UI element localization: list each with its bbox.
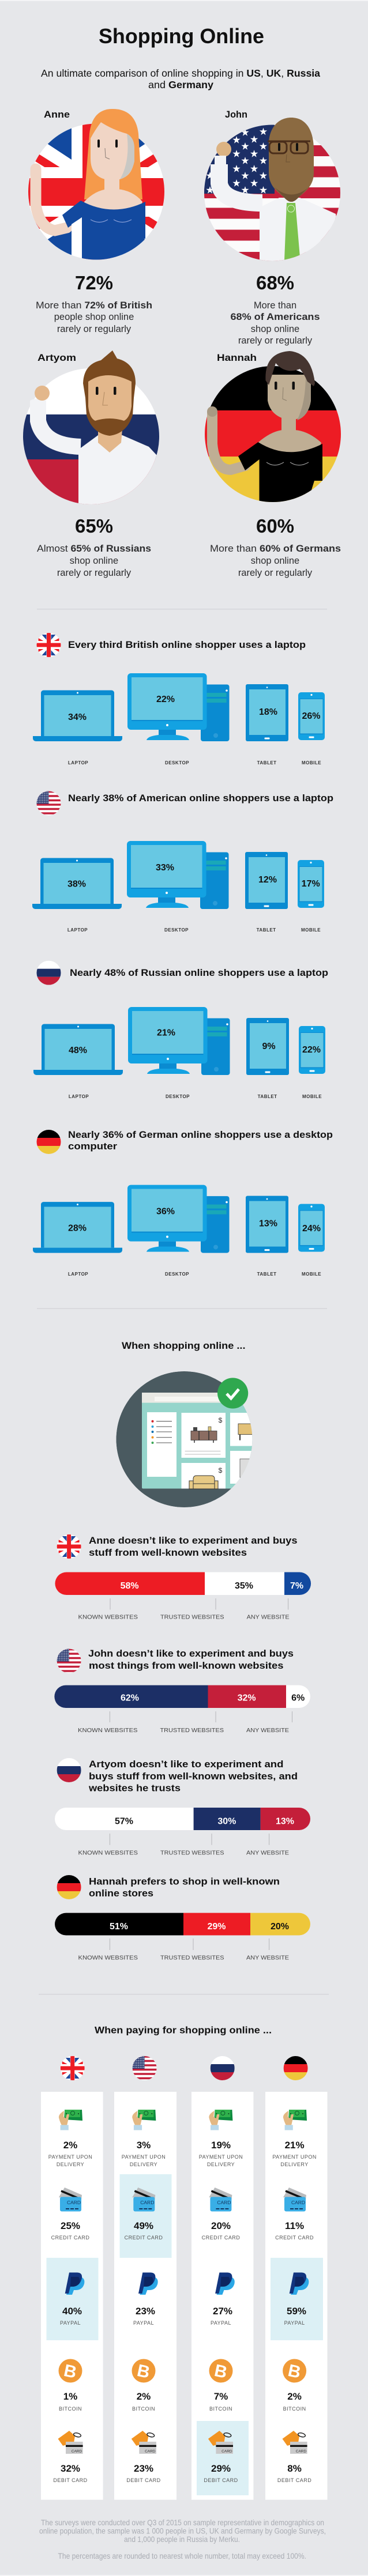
- icon: German flag: [284, 2056, 308, 2080]
- heading: Germany devices: computer: [68, 1141, 117, 1152]
- figure: John: [215, 118, 346, 265]
- subtitle: An ultimate comparison of online shopping in US, UK, Russia: [41, 67, 320, 79]
- bitcoin: 2%: [137, 2391, 151, 2402]
- description: Russians: Almost 65% of Russians: [37, 544, 151, 554]
- name: John: John: [225, 109, 247, 120]
- paypal: PAYPAL: [60, 2320, 81, 2326]
- paypal: PAYPAL: [211, 2320, 231, 2326]
- stacked bar: John: 62%: [121, 1694, 139, 1703]
- payment upon delivery: PAYMENT UPON: [48, 2154, 92, 2160]
- devices: US: 12%: [258, 875, 277, 885]
- stacked bar: Artyom: 57%: [115, 1817, 133, 1826]
- devices: Germany: 28%: [68, 1223, 87, 1234]
- credit card: CREDIT CARD: [275, 2235, 314, 2241]
- bitcoin: BITCOIN: [283, 2406, 306, 2412]
- devices: Germany: 24%: [302, 1224, 321, 1234]
- bitcoin: 1%: [63, 2391, 77, 2402]
- devices: US: 33%: [156, 863, 174, 873]
- devices: Germany: TABLET: [257, 1272, 277, 1277]
- stat: 68%: 68%: [256, 272, 294, 293]
- devices: US: TABLET: [257, 927, 276, 933]
- debit card: 8%: [287, 2463, 302, 2474]
- stacked bar: Artyom: 13%: [276, 1817, 294, 1826]
- debit card: [277, 2431, 311, 2483]
- stacked bar: Hannah: 20%: [271, 1922, 289, 1932]
- description: British: More than 72% of British: [36, 300, 152, 311]
- payment upon delivery: PAYMENT UPON: [122, 2154, 166, 2160]
- bar labels: Anne: TRUSTED WEBSITES: [160, 1614, 224, 1621]
- payment upon delivery: 21%: [285, 2140, 305, 2151]
- heading: Artyom: websites he trusts: [88, 1782, 181, 1794]
- debit card: [53, 2431, 88, 2483]
- devices: Russia: [33, 1007, 325, 1099]
- footnote: online population, the sample was 1 000 people in US, UK and Germany by Google Surveys,: [39, 2526, 326, 2535]
- devices: UK: DESKTOP: [165, 760, 189, 765]
- devices: Germany: 13%: [259, 1219, 277, 1229]
- name: Hannah: Hannah: [217, 352, 257, 363]
- figure: Anne: [36, 109, 145, 265]
- stacked bar: Hannah: [55, 1913, 310, 1936]
- heading: Hannah: Hannah prefers to shop in well-known: [89, 1876, 280, 1887]
- bar labels: John: ANY WEBSITE: [246, 1727, 289, 1734]
- payment upon delivery: DELIVERY: [207, 2162, 235, 2167]
- stacked bar: Anne: [55, 1572, 311, 1595]
- stacked bar: John: [54, 1685, 310, 1708]
- stacked bar: Artyom: 30%: [217, 1817, 236, 1826]
- footnote: [39, 2518, 326, 2560]
- description: Germans: shop online: [251, 556, 299, 566]
- icon: Russian flag: [37, 961, 61, 985]
- description: Germans: More than 60% of Germans: [210, 544, 341, 554]
- icon: US flag: [133, 2056, 157, 2080]
- debit card: [204, 2431, 238, 2483]
- column: US payments: [114, 2056, 177, 2500]
- section: US devices: [32, 791, 333, 933]
- title: Shopping Online: [99, 24, 264, 48]
- bar labels: Hannah: ANY WEBSITE: [246, 1954, 289, 1961]
- bar labels: Anne: ANY WEBSITE: [247, 1614, 290, 1621]
- stacked bar: Anne: 35%: [235, 1581, 253, 1591]
- credit card: 25%: [61, 2220, 80, 2231]
- description: Americans: shop online: [251, 324, 299, 334]
- devices: US: 17%: [302, 879, 320, 889]
- debit card: 32%: [61, 2463, 80, 2474]
- illustration: online store window: [116, 1371, 257, 1507]
- name: Artyom: Artyom: [37, 352, 76, 363]
- devices: UK: 34%: [68, 712, 87, 722]
- devices: UK: [33, 673, 325, 765]
- description: British: rarely or regularly: [57, 324, 132, 334]
- payment upon delivery: 2%: [63, 2140, 77, 2151]
- stacked bar: John: 6%: [291, 1694, 305, 1703]
- payment upon delivery: PAYMENT UPON: [199, 2154, 243, 2160]
- heading: Hannah: [89, 1876, 280, 1899]
- icon: UK flag: [57, 1534, 81, 1559]
- paypal: 40%: [62, 2306, 82, 2317]
- payment upon delivery: [272, 2110, 317, 2167]
- UK flag circle: [28, 123, 164, 260]
- bar labels: Artyom: ANY WEBSITE: [246, 1849, 289, 1856]
- bitcoin: 2%: [287, 2391, 302, 2402]
- devices: Germany: 36%: [156, 1207, 175, 1216]
- heading: John: John doesn’t like to experiment and buys: [88, 1648, 294, 1659]
- bar labels: Hannah: [78, 1938, 289, 1961]
- figure: Artyom: [30, 350, 162, 507]
- bar labels: Artyom: TRUSTED WEBSITES: [160, 1849, 224, 1856]
- paypal: 27%: [213, 2306, 232, 2317]
- stacked bar: Hannah: 51%: [110, 1922, 128, 1932]
- stacked bar: Artyom: [55, 1808, 310, 1830]
- heading: Germany devices: [68, 1129, 333, 1152]
- devices: Russia: LAPTOP: [69, 1094, 89, 1099]
- icon: Russian flag: [211, 2056, 235, 2080]
- description: Americans: 68% of Americans: [231, 312, 320, 322]
- section: Germany devices: [33, 1129, 333, 1277]
- bitcoin: B: [286, 2361, 302, 2382]
- icon: UK flag: [37, 633, 61, 657]
- icon: US flag: [37, 791, 61, 815]
- bitcoin: B: [136, 2361, 152, 2382]
- description: British: [36, 300, 152, 334]
- bitcoin: BITCOIN: [59, 2406, 82, 2412]
- heading: Russia devices: Nearly 48% of Russian online shoppers use a laptop: [70, 967, 328, 978]
- devices: Russia: 9%: [262, 1042, 276, 1051]
- section: UK devices: [33, 633, 325, 765]
- description: Germans: [210, 544, 341, 578]
- bitcoin: [132, 2359, 156, 2412]
- figure: Hannah: [207, 351, 322, 507]
- payment upon delivery: [48, 2110, 92, 2167]
- section: Artyom websites: [55, 1758, 310, 1856]
- paypal: [133, 2272, 158, 2326]
- icon: US flag: [57, 1649, 81, 1673]
- payment upon delivery: DELIVERY: [280, 2162, 309, 2167]
- bar labels: John: TRUSTED WEBSITES: [160, 1727, 224, 1734]
- paypal: [284, 2272, 309, 2326]
- column: UK payments: [41, 2056, 103, 2500]
- debit card: 23%: [134, 2463, 153, 2474]
- highlight: PayPal: [46, 2258, 98, 2340]
- devices: Germany: LAPTOP: [68, 1272, 88, 1277]
- payment upon delivery: 3%: [137, 2140, 151, 2151]
- heading: Anne: stuff from well-known websites: [89, 1547, 247, 1558]
- devices: Germany: [33, 1185, 325, 1277]
- paypal: [211, 2272, 235, 2326]
- payment upon delivery: [122, 2110, 166, 2167]
- credit card: 20%: [211, 2220, 231, 2231]
- credit card: [275, 2187, 314, 2241]
- bitcoin: BITCOIN: [132, 2406, 155, 2412]
- credit card: 49%: [134, 2220, 153, 2231]
- stacked bar: Anne: 58%: [121, 1581, 139, 1591]
- illustration: online store window: $: [219, 1416, 223, 1424]
- devices: UK: 22%: [156, 695, 175, 704]
- icon: UK flag: [61, 2056, 85, 2080]
- footnote: The percentages are rounded to nearest whole number, total may exceed 100%.: [58, 2551, 306, 2560]
- heading: John: most things from well-known websites: [89, 1660, 284, 1671]
- credit card: CREDIT CARD: [202, 2235, 240, 2241]
- footnote: The surveys were conducted over Q3 of 2015 on sample representative in demographics on: [41, 2518, 324, 2527]
- description: Russians: rarely or regularly: [57, 568, 132, 578]
- Russian flag circle: [23, 368, 159, 506]
- heading: when paying: When paying for shopping online ...: [95, 2024, 272, 2036]
- bitcoin: [209, 2359, 233, 2412]
- payment upon delivery: 19%: [211, 2140, 231, 2151]
- heading: when shopping online: When shopping online ...: [122, 1340, 246, 1351]
- heading: Hannah: online stores: [89, 1888, 153, 1899]
- subtitle: and Germany: [148, 79, 213, 90]
- devices: Russia: DESKTOP: [166, 1094, 190, 1099]
- icon: Russian flag: [57, 1758, 81, 1782]
- heading: Artyom: [88, 1759, 298, 1794]
- devices: UK: MOBILE: [302, 760, 321, 765]
- credit card: [202, 2187, 240, 2241]
- highlight: PayPal: [271, 2258, 323, 2340]
- payment upon delivery: [199, 2110, 243, 2167]
- bar labels: Hannah: TRUSTED WEBSITES: [160, 1954, 224, 1961]
- paypal: [60, 2272, 84, 2326]
- section: John websites: [54, 1648, 310, 1734]
- description: Russians: shop online: [70, 556, 118, 566]
- description: Americans: More than: [254, 300, 296, 311]
- devices: US: LAPTOP: [67, 927, 88, 933]
- devices: Russia: TABLET: [258, 1094, 277, 1099]
- bitcoin: B: [62, 2361, 78, 2382]
- column: Germany payments: [265, 2056, 328, 2500]
- devices: Russia: 22%: [302, 1045, 321, 1055]
- heading: John: [88, 1648, 294, 1671]
- bitcoin: [283, 2359, 306, 2412]
- heading: Anne: [89, 1535, 298, 1558]
- stat: 65%: 65%: [75, 515, 113, 537]
- bitcoin: 7%: [214, 2391, 228, 2402]
- payment upon delivery: PAYMENT UPON: [272, 2154, 317, 2160]
- highlight: debit card: [197, 2421, 249, 2495]
- devices: Russia: MOBILE: [302, 1094, 322, 1099]
- debit card: DEBIT CARD: [126, 2477, 161, 2483]
- bar labels: Hannah: KNOWN WEBSITES: [78, 1954, 138, 1961]
- debit card: 29%: [211, 2463, 231, 2474]
- credit card: CREDIT CARD: [51, 2235, 89, 2241]
- section: Anne websites: [55, 1534, 311, 1621]
- debit card: DEBIT CARD: [204, 2477, 238, 2483]
- devices: UK: 18%: [259, 707, 277, 717]
- highlight: credit card: [120, 2174, 172, 2258]
- bar labels: Artyom: [78, 1834, 289, 1856]
- section: Russia devices: [33, 961, 328, 1099]
- illustration: online store window: $: [219, 1466, 223, 1474]
- debit card: [126, 2431, 161, 2483]
- debit card: DEBIT CARD: [53, 2477, 88, 2483]
- stat: 60%: 60%: [256, 515, 294, 537]
- heading: Artyom: Artyom doesn’t like to experiment and: [89, 1759, 284, 1770]
- paypal: PAYPAL: [284, 2320, 305, 2326]
- stacked bar: John: 32%: [238, 1694, 256, 1703]
- name: Anne: Anne: [44, 109, 70, 120]
- column: Russia payments: [191, 2056, 253, 2500]
- devices: US: MOBILE: [301, 927, 321, 933]
- bar labels: Anne: [78, 1598, 290, 1621]
- footnote: and 1,000 people in Russia by Merku.: [124, 2534, 240, 2544]
- heading: Anne: Anne doesn’t like to experiment and buys: [89, 1535, 298, 1546]
- panel: John: [204, 109, 346, 346]
- devices: UK: 26%: [302, 711, 321, 721]
- panel: Anne: [28, 109, 164, 334]
- icon: German flag: [37, 1130, 61, 1154]
- stat: 72%: 72%: [75, 272, 113, 293]
- description: British: people shop online: [54, 312, 134, 322]
- payment upon delivery: DELIVERY: [130, 2162, 157, 2167]
- credit card: CREDIT CARD: [125, 2235, 163, 2241]
- payment upon delivery: DELIVERY: [57, 2162, 84, 2167]
- paypal: PAYPAL: [133, 2320, 154, 2326]
- section: Hannah websites: [55, 1875, 310, 1961]
- devices: Germany: DESKTOP: [165, 1272, 189, 1277]
- heading: US devices: Nearly 38% of American online shoppers use a laptop: [68, 793, 333, 804]
- bitcoin: B: [213, 2361, 229, 2382]
- heading: UK devices: Every third British online shopper uses a laptop: [68, 639, 306, 650]
- devices: Russia: 21%: [157, 1028, 175, 1038]
- devices: UK: LAPTOP: [68, 760, 88, 765]
- heading: Artyom: buys stuff from well-known websites, and: [89, 1771, 298, 1782]
- description: Americans: rarely or regularly: [238, 335, 313, 346]
- devices: US: DESKTOP: [164, 927, 189, 933]
- US flag circle: [204, 125, 341, 261]
- devices: Russia: 48%: [69, 1046, 87, 1055]
- bar labels: Anne: KNOWN WEBSITES: [78, 1614, 138, 1621]
- German flag circle: [205, 366, 341, 502]
- description: Americans: [231, 300, 320, 346]
- credit card: [51, 2187, 89, 2241]
- panel: Artyom: [23, 350, 162, 578]
- panel: Hannah: [205, 351, 341, 578]
- bar labels: John: KNOWN WEBSITES: [78, 1727, 137, 1734]
- stacked bar: Anne: 7%: [290, 1581, 303, 1591]
- heading: Germany devices: Nearly 36% of German online shoppers use a desktop: [68, 1129, 333, 1140]
- paypal: 23%: [136, 2306, 155, 2317]
- paypal: 59%: [287, 2306, 306, 2317]
- credit card: 11%: [285, 2220, 304, 2231]
- devices: Germany: MOBILE: [302, 1272, 321, 1277]
- bitcoin: BITCOIN: [209, 2406, 232, 2412]
- description: Russians: [37, 544, 151, 578]
- subtitle: [41, 67, 320, 90]
- icon: German flag: [57, 1875, 81, 1899]
- credit card: [125, 2187, 163, 2241]
- bar labels: John: [78, 1711, 292, 1734]
- devices: US: 38%: [67, 880, 86, 889]
- devices: UK: TABLET: [257, 760, 277, 765]
- bar labels: Artyom: KNOWN WEBSITES: [78, 1849, 138, 1856]
- devices: US: [32, 841, 324, 933]
- debit card: DEBIT CARD: [277, 2477, 311, 2483]
- description: Germans: rarely or regularly: [238, 568, 313, 578]
- stacked bar: Hannah: 29%: [207, 1922, 226, 1932]
- bitcoin: [59, 2359, 82, 2412]
